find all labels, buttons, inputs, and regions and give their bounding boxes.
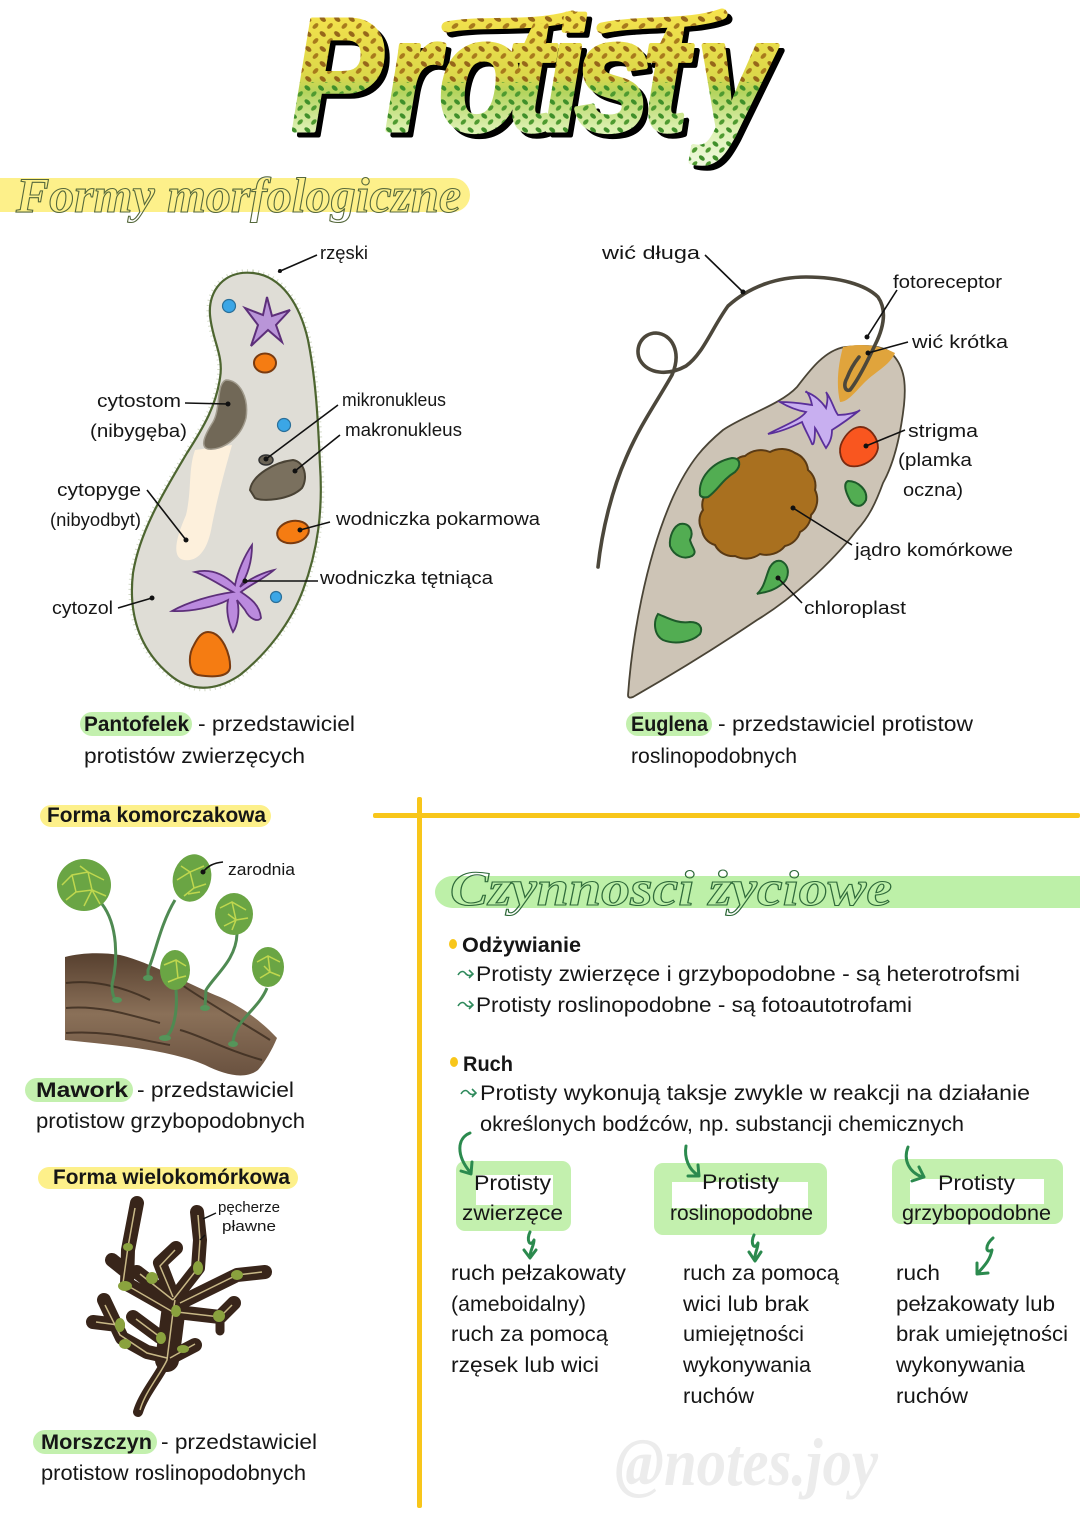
blue granules (222, 300, 290, 602)
caption: euglena (626, 712, 974, 768)
label: pecherze plawne: pławne (222, 1218, 276, 1235)
long flagellum (598, 277, 883, 567)
heading: czynnosci zyciowe (435, 860, 1080, 916)
labels: wodniczka tętniąca (319, 568, 494, 588)
label: zarodnia: zarodnia (228, 860, 296, 879)
labels: oczna) (903, 480, 963, 500)
text block: roslinopodobne movement: wici lub brak (682, 1293, 810, 1316)
log (65, 953, 277, 1075)
text block: zwierzece movement: rzęsek lub wici (451, 1354, 599, 1377)
arrows: to descriptions (524, 1232, 993, 1274)
text block: grzybopodobne movement: wykonywania (895, 1354, 1025, 1377)
nucleus (699, 449, 817, 559)
text block: grzybopodobne movement: pełzakowaty lub (896, 1293, 1055, 1316)
caption: pantofelek: protistów zwierzęcych (84, 745, 305, 768)
box: protisty zwierzece (456, 1161, 571, 1231)
cell body with cilia (132, 273, 321, 688)
chloroplasts (655, 458, 866, 642)
caption: euglena: Euglena (631, 713, 708, 736)
text block: zwierzece movement (451, 1262, 627, 1377)
cell body (628, 346, 905, 698)
caption: pantofelek: Pantofelek (84, 713, 189, 736)
diagram: pantofelek (50, 243, 541, 688)
labels: chloroplast (804, 598, 906, 618)
cytopyge channel (176, 445, 232, 560)
dark branches (93, 1203, 265, 1412)
caption: mawork: Mawork (36, 1079, 128, 1102)
heading: Formy morfologiczne: Formy morfologiczne (15, 167, 461, 223)
cytostom (204, 380, 247, 449)
large star contractile vacuole (172, 545, 274, 632)
labels: cytostom (97, 391, 181, 411)
text block: zwierzece movement: (ameboidalny) (451, 1293, 586, 1316)
contractile vacuole star (768, 392, 860, 448)
labels: rzęski (320, 243, 368, 263)
text block: zwierzece movement: ruch za pomocą (451, 1323, 608, 1346)
labels: wić krótka (911, 332, 1009, 352)
box: protisty grzybopodobne: grzybopodobne (902, 1202, 1051, 1225)
text block: roslinopodobne movement: wykonywania (682, 1354, 811, 1377)
sporangia (57, 850, 284, 990)
labels: cytozol (52, 598, 113, 618)
caption: mawork: - przedstawiciel (137, 1079, 294, 1102)
text block: grzybopodobne movement: ruchów (896, 1385, 969, 1408)
micronucleus (259, 455, 273, 465)
labels (601, 243, 1013, 618)
caption: pantofelek (80, 712, 355, 768)
text block: odzywianie: Protisty roslinopodobne - są fotoautotrofami (476, 994, 912, 1017)
caption: morszczyn (33, 1430, 317, 1485)
small star vacuole (245, 297, 290, 346)
labels: (nibyodbyt) (50, 510, 141, 530)
labels: fotoreceptor (893, 272, 1002, 292)
text block: grzybopodobne movement: ruch (896, 1262, 940, 1285)
heading: forma wielokomorkowa: Forma wielokomórkowa (53, 1166, 290, 1189)
leader lines (118, 255, 340, 608)
heading: czynnosci zyciowe: Czynnosci życiowe (450, 860, 892, 916)
orange food vacuoles (190, 354, 311, 676)
labels: wodniczka pokarmowa (335, 509, 541, 529)
caption: morszczyn: protistow roslinopodobnych (41, 1462, 306, 1485)
stalks (102, 900, 267, 1042)
box: protisty zwierzece: zwierzęce (462, 1202, 563, 1225)
label: zarodnia (200, 860, 296, 879)
photoreceptor area (838, 345, 895, 402)
text block: grzybopodobne movement: brak umiejętności (896, 1323, 1068, 1346)
labels: makronukleus (345, 420, 462, 440)
leader lines (705, 255, 908, 603)
illustration: mawork (57, 850, 296, 1075)
arrows: to boxes (460, 1133, 924, 1181)
box: protisty roslinopodobne: Protisty (702, 1171, 780, 1194)
caption: euglena: - przedstawiciel protistow (718, 713, 974, 736)
labels: (plamka (898, 450, 973, 470)
box: protisty grzybopodobne (892, 1159, 1063, 1225)
text block: ruch: określonych bodźców, np. substancji chemicznych (480, 1113, 964, 1136)
text block: ruch (450, 1053, 1030, 1136)
text block: odzywianie (449, 934, 1020, 1017)
text block: grzybopodobne movement (895, 1262, 1068, 1408)
label: pecherze plawne: pęcherze (218, 1199, 280, 1216)
illustration: morszczyn (93, 1199, 280, 1412)
text block: ruch: Ruch (463, 1053, 513, 1076)
text block: odzywianie: Protisty zwierzęce i grzybopodobne - są heterotrofsmi (476, 963, 1020, 986)
caption: mawork: protistow grzybopodobnych (36, 1110, 305, 1133)
caption: morszczyn: Morszczyn (41, 1431, 152, 1454)
labels: (nibygęba) (90, 421, 187, 441)
text block: roslinopodobne movement: ruch za pomocą (683, 1262, 839, 1285)
caption: pantofelek: - przedstawiciel (198, 713, 355, 736)
caption: euglena: roslinopodobnych (631, 745, 797, 768)
watermark: @notes.joy (615, 1424, 879, 1500)
diagram: euglena (598, 243, 1013, 698)
macronucleus (250, 460, 305, 500)
labels (50, 243, 541, 618)
labels: jądro komórkowe (854, 540, 1013, 560)
labels: cytopyge (57, 480, 141, 500)
text block: zwierzece movement: ruch pełzakowaty (451, 1262, 627, 1285)
midrib lines (96, 1208, 262, 1410)
stigma (840, 427, 878, 466)
labels: wić długa (601, 243, 701, 263)
section dividers (373, 797, 1080, 1508)
text block: odzywianie: Odżywianie (462, 934, 581, 957)
labels: strigma (908, 421, 979, 441)
box: protisty grzybopodobne: Protisty (938, 1172, 1016, 1195)
labels: mikronukleus (342, 390, 446, 410)
text block: roslinopodobne movement: umiejętności (683, 1323, 804, 1346)
box: protisty zwierzece: Protisty (474, 1172, 552, 1195)
text block: roslinopodobne movement (682, 1262, 839, 1408)
heading: forma komorczakowa: Forma komorczakowa (47, 804, 266, 827)
label: pecherze plawne (200, 1199, 280, 1240)
caption: morszczyn: - przedstawiciel (161, 1431, 317, 1454)
text block: roslinopodobne movement: ruchów (683, 1385, 755, 1408)
caption: mawork (25, 1078, 305, 1133)
box: protisty roslinopodobne (654, 1163, 827, 1235)
text block: ruch: Protisty wykonują taksje zwykle w reakcji na działanie (480, 1082, 1030, 1105)
box: protisty roslinopodobne: roslinopodobne (670, 1202, 813, 1225)
air bladders (115, 1243, 243, 1353)
